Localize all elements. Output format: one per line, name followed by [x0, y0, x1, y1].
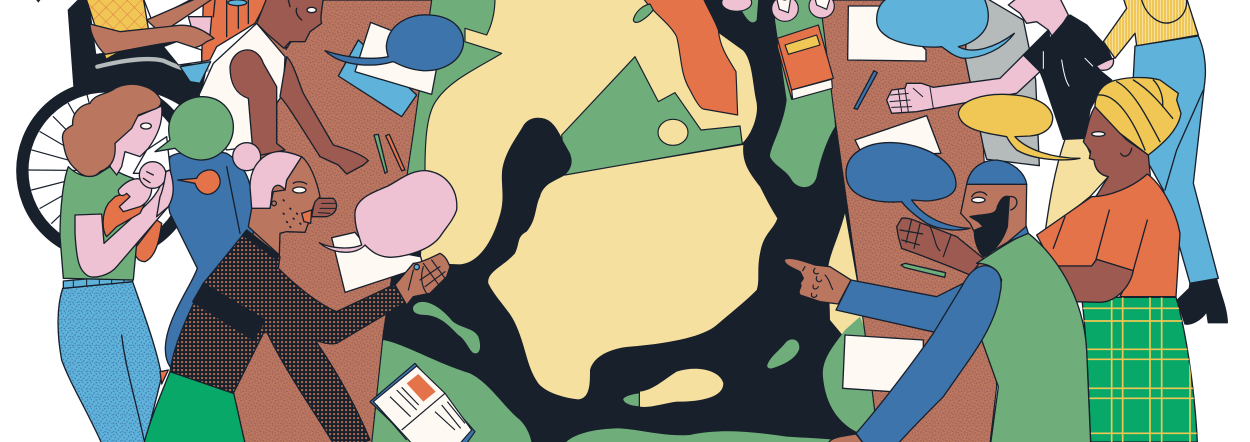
- right table: [820, 0, 997, 442]
- green land top left: [403, 0, 503, 187]
- pink man: arm stub: [1095, 58, 1114, 70]
- pink speech bubble: [319, 171, 457, 257]
- bearded man: back sleeve: [836, 280, 963, 333]
- standing man: near arm: [280, 57, 368, 174]
- paper top right: [848, 6, 926, 61]
- dark blue bubble's paper: [855, 116, 941, 157]
- front man: face: [248, 157, 320, 255]
- baby: body and head: [118, 162, 166, 212]
- blue figure: [165, 151, 253, 367]
- front man: foot piece: [160, 370, 168, 384]
- green island left: [413, 302, 480, 353]
- bearded man: pointing hand: [784, 258, 851, 304]
- pale land strip: [828, 213, 867, 336]
- turban woman: turban: [1095, 77, 1181, 155]
- bearded man: raised hand: [897, 218, 983, 275]
- turban woman: arm: [1057, 259, 1133, 302]
- green leaf island: [633, 4, 653, 22]
- lower yellow land: [488, 145, 777, 399]
- green land lower right: [823, 317, 877, 433]
- front man: green trousers: [144, 372, 245, 442]
- right side people: [784, 0, 1227, 442]
- grey figure: [965, 0, 1039, 166]
- woman: hand: [157, 170, 173, 217]
- yellow speech bubble: [958, 94, 1080, 160]
- wheelchair seat: [93, 42, 207, 110]
- book: open book on map: [370, 363, 475, 442]
- paper under pink bubble: [332, 232, 423, 292]
- left side people: [22, 0, 464, 442]
- seated person: forearm: [147, 0, 213, 29]
- wheelchair white tray: [163, 42, 202, 65]
- orange pencil: [386, 134, 405, 171]
- front man: black band: [193, 283, 265, 340]
- right book and fingers: [722, 0, 834, 99]
- seated person: arm and hand: [90, 24, 214, 54]
- light blue trousers: [1133, 36, 1218, 283]
- standing man: far arm: [230, 50, 285, 157]
- striped yellow top: [1103, 0, 1198, 58]
- green triangle land: [562, 57, 742, 175]
- front man: covering hand: [312, 198, 337, 217]
- pink man: arm and hand: [887, 55, 1040, 113]
- dark peak: [517, 118, 572, 187]
- tiny corner mark: [35, 0, 42, 3]
- orange region: [643, 0, 738, 115]
- dark sea: [375, 0, 885, 442]
- bearded man: front arm: [856, 266, 1001, 442]
- green island right: [767, 339, 799, 368]
- pink man: head: [1008, 0, 1068, 38]
- light blue speech bubble: [877, 0, 1014, 58]
- wheel: [22, 86, 191, 255]
- turban woman: skirt: [1080, 297, 1200, 442]
- green pencil: [901, 263, 946, 277]
- table surface: [820, 0, 997, 442]
- standing man: head: [257, 0, 323, 48]
- turban woman: pale garment: [1045, 138, 1108, 233]
- wheelchair back: [68, 0, 100, 87]
- bearded man: beard: [970, 196, 1009, 257]
- bearded man: collar: [1007, 226, 1028, 242]
- wheelchair grey bar: [97, 59, 207, 70]
- small green top: [735, 0, 758, 22]
- bearded man: lower hand: [828, 434, 863, 442]
- pink fingers: [722, 0, 834, 21]
- green top right land: [770, 0, 835, 187]
- seated person: paper: [143, 0, 193, 20]
- bearded man: cap: [967, 160, 1027, 184]
- paper lower: [843, 335, 923, 392]
- green island cap: [623, 393, 639, 407]
- bearded man: face: [961, 184, 1027, 257]
- woman: face: [110, 106, 162, 175]
- orange book: [777, 25, 833, 99]
- baby: wrap: [103, 192, 150, 237]
- front man: mesh top: [170, 230, 407, 442]
- seated person: shirt: [86, 0, 148, 59]
- yellow lake in green: [658, 119, 688, 145]
- blue pencil: [854, 71, 877, 109]
- green speech bubble: [155, 97, 233, 160]
- front man: hair: [250, 152, 302, 208]
- turban woman: orange shirt: [1037, 174, 1180, 297]
- pink man: black shirt: [1023, 15, 1112, 139]
- orange speech bubble: [178, 170, 220, 194]
- seated person: orange skirt: [202, 0, 268, 62]
- turban woman: face: [1083, 107, 1152, 203]
- front man: neck ring: [243, 230, 278, 260]
- woman: jeans crease: [122, 335, 144, 440]
- yellow island bottom: [640, 369, 723, 407]
- upper yellow land: [420, 0, 758, 265]
- blue sheet under paper: [338, 40, 417, 117]
- green land bottom left: [370, 340, 532, 442]
- map: sea, land and islands: [370, 0, 885, 442]
- wheelchair blue tray: [180, 62, 211, 83]
- woman: orange foot: [135, 220, 162, 262]
- green pencil: [374, 134, 387, 173]
- black boot: [1177, 279, 1227, 324]
- white paper behind woman: [133, 137, 171, 173]
- bearded man: green vest: [977, 233, 1091, 442]
- woman: arm: [75, 170, 173, 277]
- woman: jeans: [58, 282, 162, 442]
- pink bun: [233, 143, 261, 171]
- left table: [233, 0, 432, 442]
- woman: belt: [63, 275, 133, 288]
- green land bottom centre: [565, 428, 850, 442]
- standing man: vest: [199, 23, 285, 150]
- blue speech bubble: [325, 15, 464, 71]
- woman: hair: [62, 84, 161, 176]
- seated person: cup: [188, 17, 212, 35]
- orange neck detail: [286, 41, 292, 49]
- woman: shirt: [60, 167, 140, 280]
- front man: open hand: [395, 253, 450, 305]
- dark blue speech bubble: [846, 143, 970, 230]
- paper top left: [355, 22, 440, 94]
